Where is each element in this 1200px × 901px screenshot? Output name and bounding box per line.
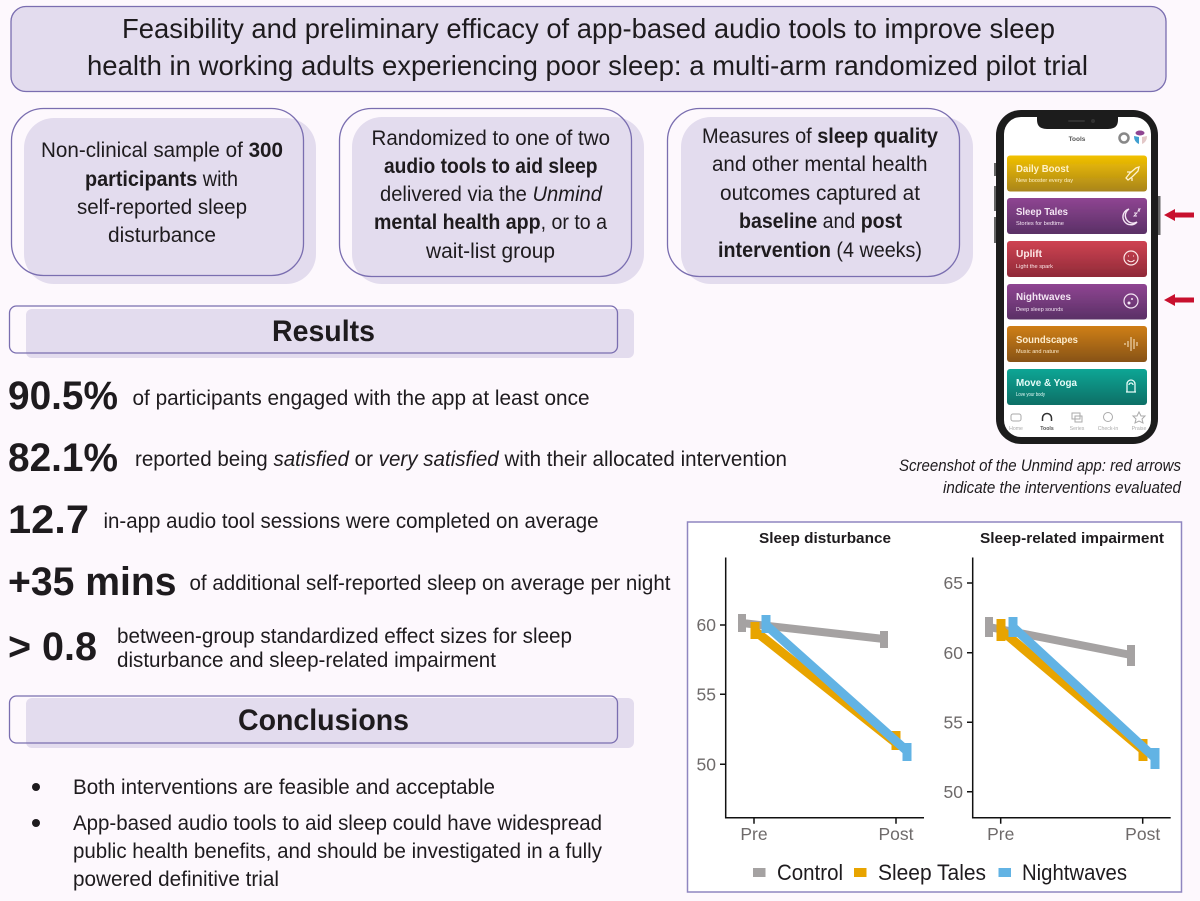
panel: sample bbox=[12, 108, 316, 284]
card: Soundscapes bbox=[1007, 326, 1147, 362]
chart: Sleep-related impairment: 55 bbox=[944, 712, 963, 732]
card: Nightwaves bbox=[1007, 284, 1147, 320]
panel: measures bbox=[668, 108, 973, 284]
card: Soundscapes: Music and nature bbox=[1016, 349, 1059, 355]
app bottom navigation: Check-in bbox=[1098, 426, 1118, 432]
chart legend: Control bbox=[777, 860, 843, 885]
stat: sessions bbox=[8, 498, 598, 542]
conclusions list: App-based audio tools to aid sleep could have widespread bbox=[73, 812, 602, 835]
chart: Sleep-related impairment bbox=[944, 530, 1171, 844]
panel: measures: outcomes captured at bbox=[720, 182, 920, 205]
stat: engagement: 90.5% bbox=[8, 374, 118, 418]
panel: charts bbox=[688, 522, 1182, 892]
stat: satisfaction: 82.1% bbox=[8, 436, 118, 480]
card: Daily Boost: Daily Boost bbox=[1016, 164, 1070, 175]
panel: randomization: mental health app, or to a bbox=[374, 211, 607, 234]
panel: measures: and other mental health bbox=[712, 153, 928, 176]
stat: satisfaction: reported being satisfied or very satisfied with their allocated intervention bbox=[135, 448, 787, 471]
screenshot caption: Screenshot of the Unmind app: red arrows bbox=[899, 457, 1181, 475]
panel: randomization: wait-list group bbox=[425, 240, 555, 263]
chart: Sleep disturbance: 50 bbox=[697, 754, 716, 774]
stat: effect sizes: disturbance and sleep-related impairment bbox=[117, 649, 496, 672]
stat: sessions: in-app audio tool sessions were completed on average bbox=[104, 510, 598, 533]
heading: Conclusions: Conclusions bbox=[238, 704, 409, 737]
card: Nightwaves: Nightwaves bbox=[1016, 292, 1071, 303]
panel: randomization: delivered via the Unmind bbox=[380, 183, 603, 206]
heading: Conclusions bbox=[10, 696, 634, 748]
title banner: health in working adults experiencing poor sleep: a multi-arm randomized pilot trial bbox=[87, 50, 1088, 81]
panel: sample: disturbance bbox=[108, 224, 216, 247]
app bottom navigation: Tools bbox=[1040, 426, 1054, 432]
panel: measures: intervention (4 weeks) bbox=[718, 239, 922, 262]
app bottom navigation bbox=[1009, 412, 1146, 432]
card: Daily Boost bbox=[1007, 156, 1147, 192]
stat: effect sizes bbox=[8, 625, 572, 672]
card: Uplift bbox=[1007, 241, 1147, 277]
card: Uplift: Light the spark bbox=[1016, 264, 1053, 270]
card: Move & Yoga: Love your body bbox=[1016, 392, 1045, 398]
chart: Sleep disturbance: Post bbox=[878, 824, 914, 844]
panel: sample: Non-clinical sample of 300 bbox=[41, 139, 283, 162]
chart: Sleep-related impairment: Sleep-related impairment bbox=[980, 530, 1164, 547]
card: Daily Boost: New booster every day bbox=[1016, 178, 1073, 184]
panel: sample: self-reported sleep bbox=[77, 196, 247, 219]
screenshot caption: indicate the interventions evaluated bbox=[943, 479, 1182, 497]
heading: Results: Results bbox=[272, 315, 375, 348]
stat: engagement: of participants engaged with the app at least once bbox=[132, 387, 590, 410]
arrow: Nightwaves bbox=[1164, 294, 1194, 306]
chart: Sleep disturbance: 60 bbox=[697, 615, 716, 635]
panel: measures: baseline and post bbox=[739, 210, 902, 233]
chart: Sleep-related impairment: 60 bbox=[944, 643, 963, 663]
stat: effect sizes: > 0.8 bbox=[8, 625, 97, 669]
card: Sleep Tales: Sleep Tales bbox=[1016, 207, 1068, 218]
panel: measures: Measures of sleep quality bbox=[702, 125, 938, 148]
title banner: Feasibility and preliminary efficacy of app-based audio tools to improve sleep bbox=[122, 13, 1055, 44]
stat: satisfaction bbox=[8, 436, 787, 480]
chart: Sleep disturbance: Pre bbox=[740, 824, 768, 844]
chart legend: Sleep Tales bbox=[878, 860, 986, 885]
icon: phone screenshot of the Unmind app bbox=[994, 110, 1160, 444]
conclusions list: public health benefits, and should be investigated in a fully bbox=[73, 840, 602, 863]
chart: Sleep disturbance bbox=[697, 530, 924, 844]
conclusions list: Both interventions are feasible and acceptable bbox=[73, 776, 495, 799]
conclusions list: powered definitive trial bbox=[73, 868, 279, 891]
app bottom navigation: Home bbox=[1009, 426, 1023, 432]
arrow: Sleep Tales bbox=[1164, 209, 1194, 221]
chart: Sleep disturbance: Sleep disturbance bbox=[759, 530, 891, 547]
conclusions list bbox=[32, 776, 602, 891]
panel: randomization bbox=[340, 108, 644, 284]
app bottom navigation: Praise bbox=[1132, 426, 1146, 432]
card: Move & Yoga: Move & Yoga bbox=[1016, 378, 1077, 389]
app bottom navigation: Series bbox=[1070, 426, 1085, 432]
card: Sleep Tales: Stories for bedtime bbox=[1016, 221, 1064, 227]
chart: Sleep disturbance: 55 bbox=[697, 684, 716, 704]
title banner bbox=[11, 6, 1166, 92]
stat: engagement bbox=[8, 374, 590, 418]
screenshot caption bbox=[899, 457, 1182, 497]
panel: sample: participants with bbox=[85, 168, 238, 191]
card: Uplift: Uplift bbox=[1016, 249, 1043, 260]
chart legend bbox=[753, 860, 1127, 885]
chart: Sleep-related impairment: Pre bbox=[987, 824, 1014, 844]
chart: Sleep-related impairment: Post bbox=[1125, 824, 1160, 844]
stat: additional sleep bbox=[8, 560, 671, 604]
stat: additional sleep: +35 mins bbox=[8, 560, 176, 604]
chart: Sleep-related impairment: 50 bbox=[944, 782, 963, 802]
card: Soundscapes: Soundscapes bbox=[1016, 335, 1078, 346]
stat: additional sleep: of additional self-reported sleep on average per night bbox=[190, 572, 671, 595]
panel: randomization: Randomized to one of two bbox=[372, 127, 610, 150]
card: Sleep Tales bbox=[1007, 198, 1147, 234]
stat: effect sizes: between-group standardized effect sizes for sleep bbox=[117, 625, 572, 648]
card: Move & Yoga bbox=[1007, 369, 1147, 405]
chart legend: Nightwaves bbox=[1022, 860, 1127, 885]
stat: sessions: 12.7 bbox=[8, 498, 89, 542]
panel: randomization: audio tools to aid sleep bbox=[384, 155, 598, 178]
chart: Sleep-related impairment: 65 bbox=[944, 573, 963, 593]
card: Nightwaves: Deep sleep sounds bbox=[1016, 307, 1063, 313]
heading: Results bbox=[10, 306, 634, 358]
icon: phone screenshot of the Unmind app: Tools bbox=[1069, 136, 1086, 143]
